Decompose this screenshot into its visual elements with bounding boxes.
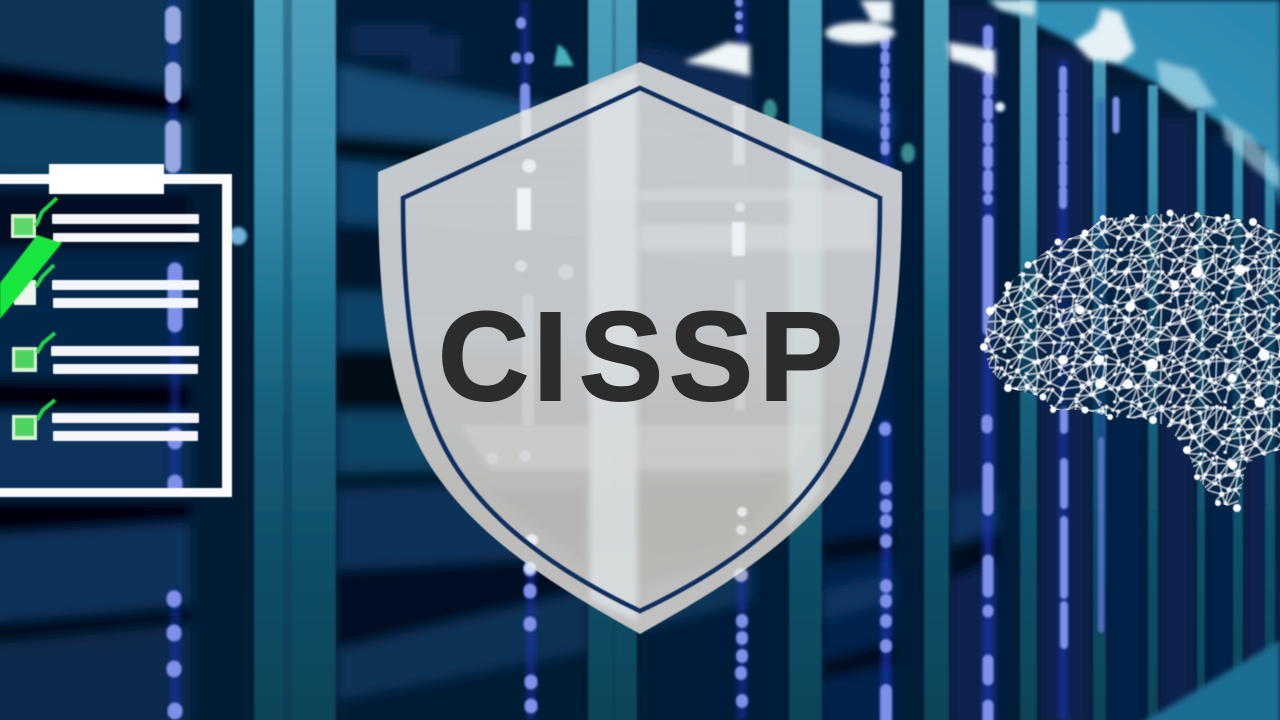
- check row 3: [12, 333, 199, 374]
- ceiling: [985, 0, 1280, 210]
- check row 1: [11, 198, 199, 242]
- neural network brain: [979, 208, 1280, 513]
- check row 2: [14, 265, 199, 308]
- teal pillars: [254, 0, 1275, 720]
- brain bright nodes: [980, 210, 1270, 512]
- LED glow strips: [173, 0, 1101, 720]
- clipboard clip: [49, 164, 164, 194]
- shield inner outline: [403, 88, 880, 611]
- check row 4: [12, 400, 199, 441]
- clipboard frame: [0, 174, 232, 497]
- shield reflections: [410, 70, 875, 622]
- shield LED reflections: [486, 105, 748, 582]
- clipboard checklist: [0, 164, 232, 497]
- title: CISSP: CISSP: [438, 286, 843, 427]
- shield: [378, 62, 902, 634]
- floor glow: [1130, 640, 1280, 720]
- LED dots: [173, 2, 1116, 720]
- status indicators: [229, 44, 1005, 245]
- brain mesh: [984, 213, 1280, 506]
- shield body: [378, 62, 902, 634]
- ceiling lights: [684, 0, 1280, 190]
- large green check stroke: [0, 235, 62, 319]
